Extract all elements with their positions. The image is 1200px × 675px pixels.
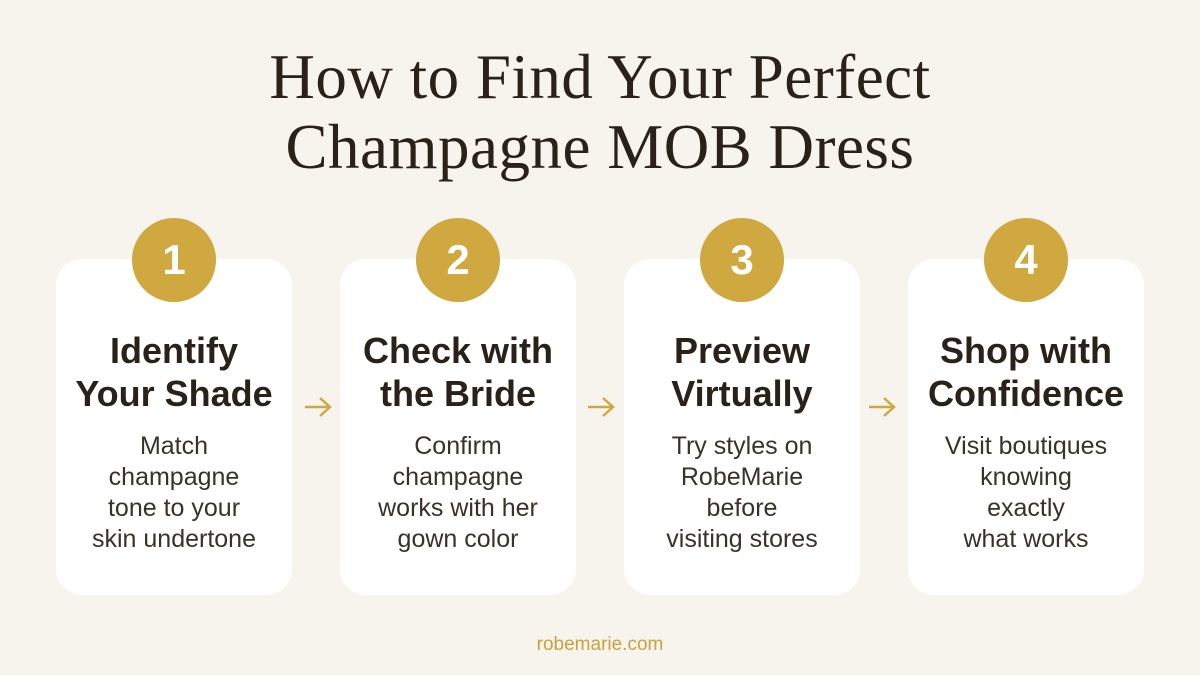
text 4: knowing — [980, 463, 1072, 491]
text 1 — [92, 432, 256, 553]
heading 3: Preview — [674, 330, 810, 371]
text 3: before — [707, 494, 777, 522]
panel: step 3 — [624, 259, 860, 595]
panel: step 4 — [908, 259, 1144, 595]
arrow 2 — [588, 397, 615, 417]
badge 3 — [700, 218, 784, 302]
text 4: what works — [963, 525, 1089, 553]
badge 2: 2 — [446, 236, 470, 283]
heading 1: Your Shade — [75, 373, 273, 414]
badge 1 — [132, 218, 216, 302]
text 2 — [378, 432, 538, 553]
heading 3 — [671, 330, 813, 414]
heading 4: Shop with — [940, 330, 1112, 371]
panel: step 1 — [56, 259, 292, 595]
text 4 — [945, 432, 1107, 553]
title — [269, 42, 931, 182]
text 3: RobeMarie — [681, 463, 803, 491]
badge 3: 3 — [730, 236, 754, 283]
footer: robemarie.com — [537, 634, 663, 655]
title: How to Find Your Perfect — [269, 42, 931, 112]
text 4: exactly — [987, 494, 1065, 522]
text 1: Match — [140, 432, 208, 460]
text 1: champagne — [109, 463, 239, 491]
heading 4: Confidence — [928, 373, 1124, 414]
text 3 — [666, 432, 818, 553]
arrow 1 — [305, 397, 332, 417]
heading 2 — [363, 330, 553, 414]
text 2: champagne — [393, 463, 523, 491]
badge 1: 1 — [162, 236, 186, 283]
text 2: Confirm — [414, 432, 502, 460]
heading 1: Identify — [110, 330, 238, 371]
badge 2 — [416, 218, 500, 302]
text 2: gown color — [398, 525, 518, 553]
heading 1 — [75, 330, 273, 414]
text 3: visiting stores — [666, 525, 818, 553]
text 1: tone to your — [108, 494, 240, 522]
arrow 3 — [869, 397, 896, 417]
heading 2: Check with — [363, 330, 553, 371]
text 3: Try styles on — [672, 432, 812, 460]
heading 2: the Bride — [380, 373, 536, 414]
text 2: works with her — [378, 494, 538, 522]
panel: step 2 — [340, 259, 576, 595]
badge 4: 4 — [1014, 236, 1038, 283]
text 1: skin undertone — [92, 525, 256, 553]
heading 4 — [928, 330, 1124, 414]
badge 4 — [984, 218, 1068, 302]
text 4: Visit boutiques — [945, 432, 1107, 460]
heading 3: Virtually — [671, 373, 813, 414]
title: Champagne MOB Dress — [286, 112, 914, 182]
